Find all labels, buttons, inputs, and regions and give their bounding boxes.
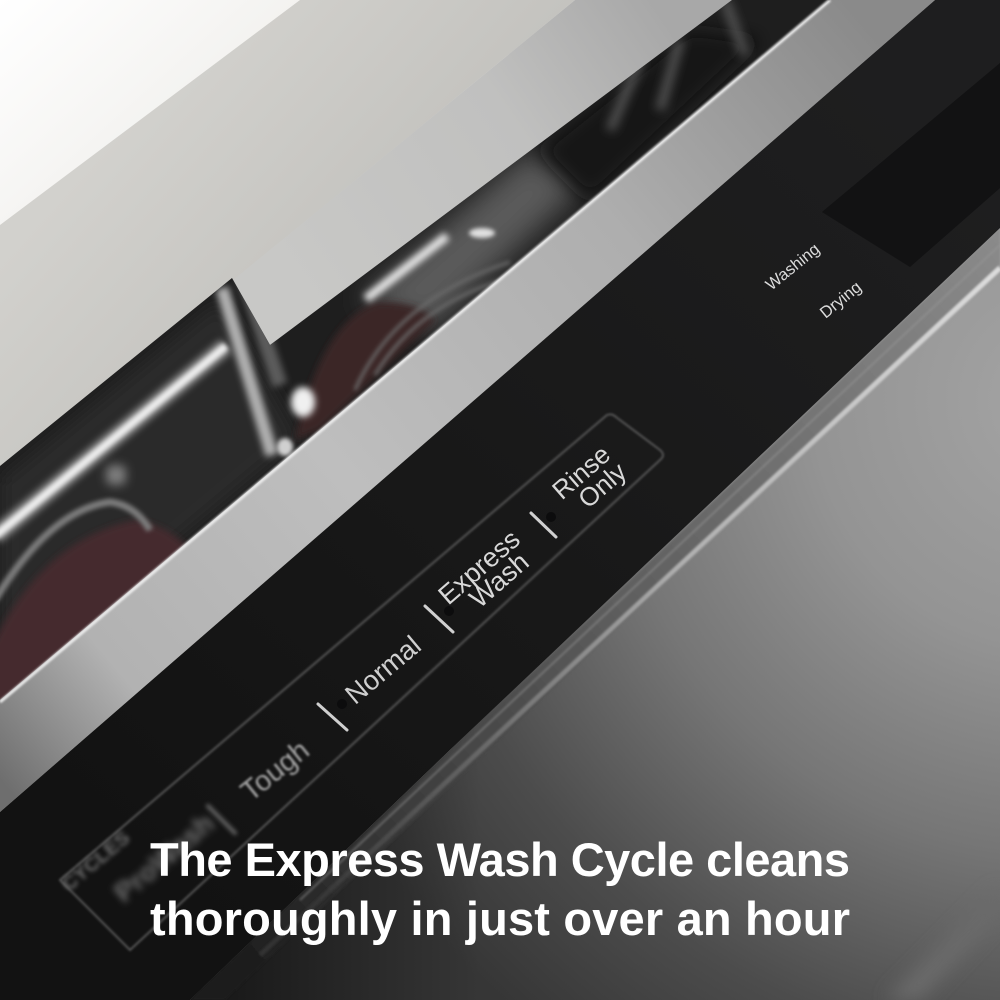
interior: small specular xyxy=(277,438,293,456)
interior: highlight spot xyxy=(469,228,495,238)
interior: vertical post xyxy=(222,288,272,455)
cycles frame xyxy=(60,414,663,950)
label: CYCLES: CYCLES xyxy=(58,827,134,896)
separators xyxy=(208,513,556,833)
label: Tough: Tough xyxy=(235,734,316,808)
interior: grey haze upper rack xyxy=(360,150,580,330)
indicator dots xyxy=(337,512,556,709)
title xyxy=(150,833,850,945)
label: Normal: Normal xyxy=(339,629,427,710)
label: ProWash: ProWash xyxy=(108,807,220,908)
title: thoroughly in just over an hour xyxy=(150,892,850,945)
interior: red dish centre xyxy=(295,303,435,440)
door face xyxy=(150,225,1000,1000)
interior: upper bright rod xyxy=(366,236,447,299)
strip highlight edge xyxy=(0,0,830,702)
interior: tine shapes upper right xyxy=(610,0,745,130)
label: Express Wash: Wash xyxy=(464,547,535,614)
stainless top strip xyxy=(0,0,935,812)
interior: red dish left xyxy=(0,520,195,710)
interior: curved dish rack wire xyxy=(0,502,150,600)
title: The Express Wash Cycle cleans xyxy=(150,833,850,886)
label: Drying: Drying xyxy=(817,278,865,322)
interior: long bright rod xyxy=(0,346,226,536)
light grey rack panel xyxy=(215,0,740,390)
dishwasher interior xyxy=(0,0,830,700)
door trim highlights xyxy=(190,228,1000,1000)
interior: curved wires right xyxy=(355,262,520,390)
interior: rack clip xyxy=(106,465,126,485)
label: Washing: Washing xyxy=(762,240,823,294)
label: Express Wash: Express xyxy=(432,524,526,611)
display window xyxy=(822,63,1000,267)
interior: specular spot xyxy=(291,387,315,417)
label: Rinse Only: Rinse xyxy=(546,439,616,505)
door: lower-right streak xyxy=(885,885,1000,1000)
interior: dark back wall xyxy=(540,30,760,200)
interior: dark post shadow xyxy=(243,275,280,385)
interior: long rod highlight xyxy=(0,346,226,536)
door: lower-left falloff xyxy=(190,780,420,1000)
beige door panel xyxy=(0,0,575,472)
interior: grey haze lower rack xyxy=(2,310,292,617)
label: Rinse Only: Only xyxy=(572,456,632,514)
